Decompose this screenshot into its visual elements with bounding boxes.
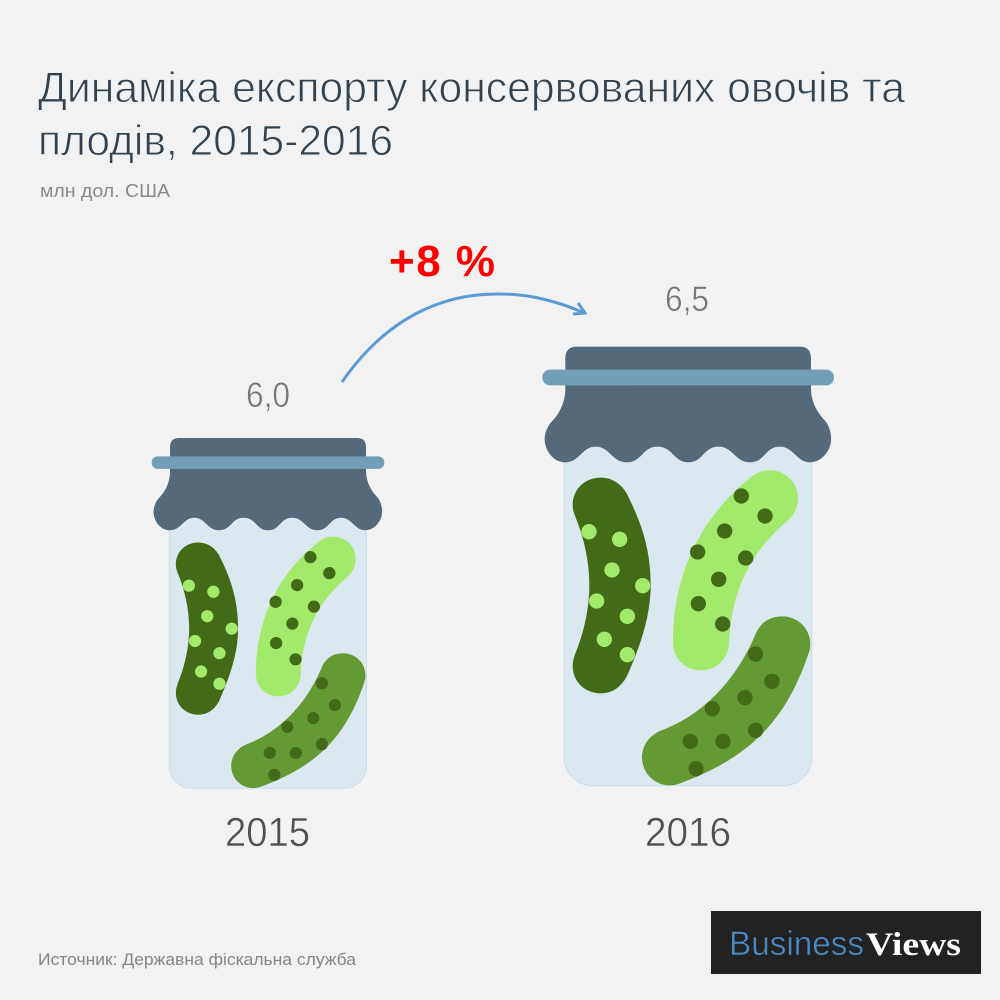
growth label: +8 % (389, 237, 495, 286)
jar 2016 (542, 347, 834, 786)
lid band (152, 456, 384, 469)
year label 2016: 2016 (645, 809, 731, 855)
pickle: light green (673, 470, 798, 670)
year label 2015: 2015 (225, 809, 310, 855)
title: Динаміка експорту консервованих овочів та (38, 64, 905, 112)
logo: BusinessViews (711, 911, 981, 974)
jar 2015 (152, 438, 384, 788)
pickle: dark green (573, 478, 651, 693)
lid band (542, 370, 834, 385)
pickle: dark green (176, 543, 238, 715)
jar body (169, 504, 367, 788)
value 2016: 6,5 (665, 280, 709, 319)
jar lid cloth (154, 438, 382, 530)
pickle: medium green (642, 616, 810, 785)
title: плодів, 2015-2016 (38, 117, 393, 165)
logo: BusinessViews: Views (866, 927, 961, 963)
pickle: light green (256, 537, 356, 696)
subtitle: units: млн дол. США (40, 181, 170, 201)
arrow: growth from 2015 to 2016 (342, 294, 585, 382)
logo: BusinessViews: Business (729, 925, 864, 963)
title (38, 64, 905, 165)
jar body (564, 430, 812, 786)
value 2015: 6,0 (246, 376, 290, 415)
jar lid cloth (545, 347, 831, 462)
pickle: medium green (231, 653, 366, 788)
source note: Источник: Державна фіскальна служба (38, 950, 357, 969)
